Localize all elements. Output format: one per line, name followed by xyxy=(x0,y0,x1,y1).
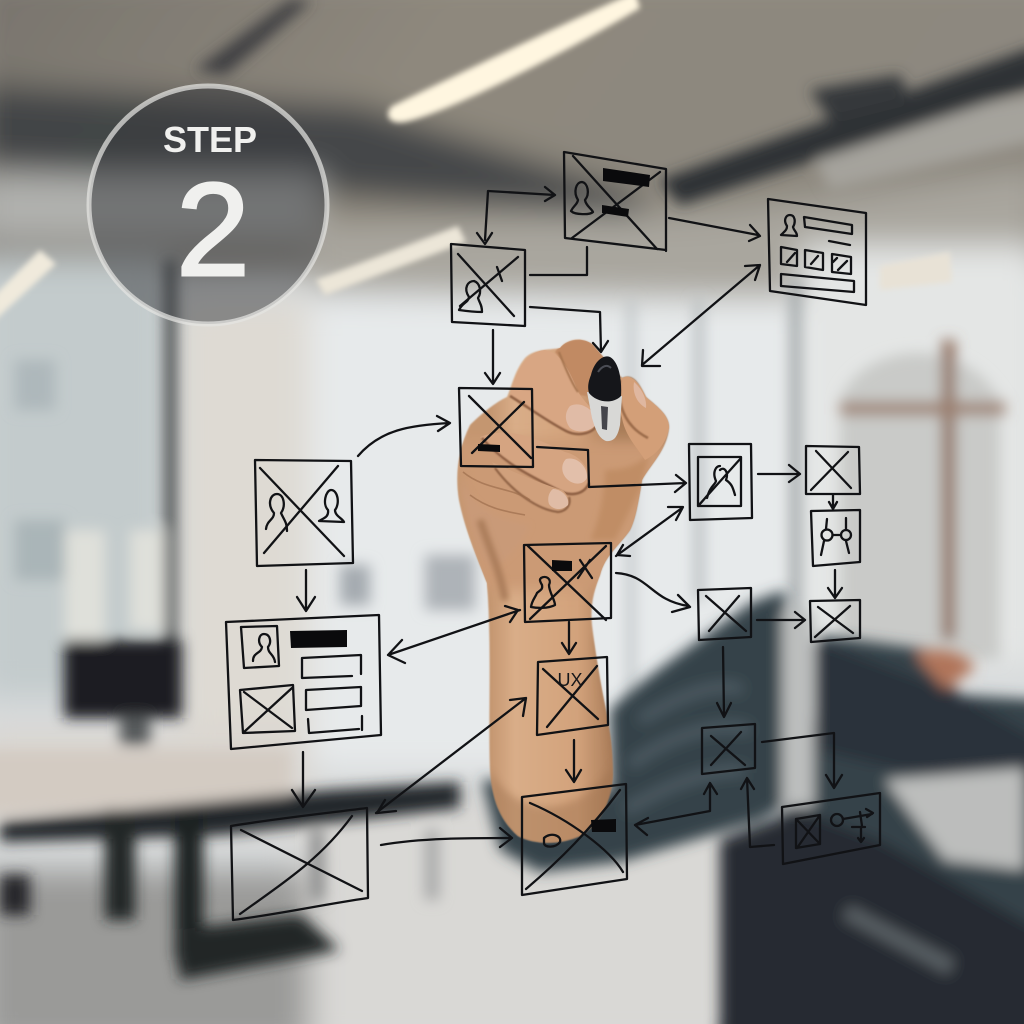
wireframe: profile card top right xyxy=(768,199,866,305)
fourth finger xyxy=(532,480,567,496)
step badge xyxy=(89,86,327,324)
wireframe: nested person box xyxy=(689,444,752,520)
palm shadow under thumb xyxy=(592,459,647,540)
wireframe: top card with person xyxy=(564,152,666,251)
third finger xyxy=(480,433,589,494)
fingernails xyxy=(566,404,597,431)
wireframe: large profile card xyxy=(226,615,381,749)
wireframe: box on hand xyxy=(459,388,533,467)
wireframe: box on sleeve xyxy=(522,784,627,895)
lit left side of the fist xyxy=(462,480,530,570)
wireframe: lower cross box xyxy=(702,724,755,774)
wireframe: box on wrist xyxy=(524,543,611,622)
wireframe: connector symbol box xyxy=(811,510,860,566)
palm tone xyxy=(455,440,670,590)
thumb xyxy=(620,376,669,460)
wireframe: small cross box xyxy=(806,446,860,494)
arrows between wireframes xyxy=(292,187,842,847)
step label: STEP xyxy=(163,119,257,160)
wireframe: middle cross box xyxy=(698,588,751,640)
UX label: UX xyxy=(557,670,583,690)
hand and forearm holding marker xyxy=(455,340,670,850)
person: dark sleeve and body xyxy=(482,590,1024,1024)
wireframe: UX box xyxy=(537,657,608,735)
wireframe: two persons box xyxy=(255,460,353,566)
wireframe flow diagram xyxy=(226,152,880,920)
wireframe: component card lower right xyxy=(782,793,880,864)
wireframe: person cross box xyxy=(451,244,525,326)
palm creases and forearm shade xyxy=(463,472,530,515)
step number: 2 xyxy=(176,156,250,303)
wireframe: right cross box xyxy=(810,600,860,642)
marker pen xyxy=(587,356,622,441)
wireframe: wide cross box bottom left xyxy=(231,808,368,920)
middle finger xyxy=(555,340,604,396)
index finger xyxy=(536,350,594,432)
